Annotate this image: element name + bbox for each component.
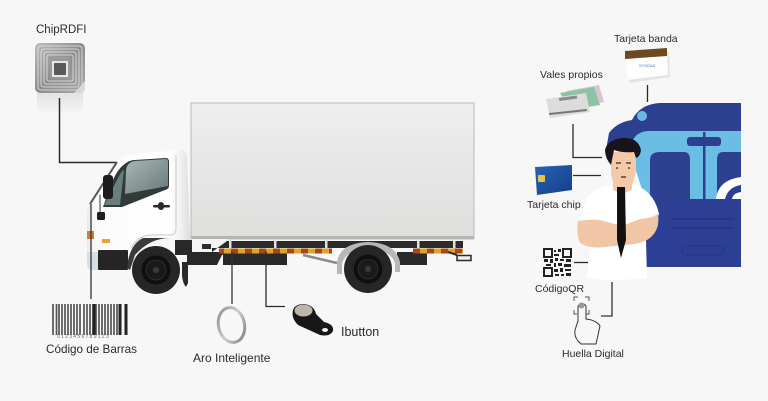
hair	[605, 138, 641, 165]
person	[577, 138, 659, 280]
connector: fingerprint	[601, 282, 612, 316]
connector: QR code	[574, 262, 588, 264]
connector: chip to cab	[60, 98, 117, 162]
cargo box	[191, 103, 474, 239]
icon: chip card	[535, 165, 572, 195]
label: Huella Digital: Huella Digital	[562, 348, 624, 360]
facial features	[616, 163, 631, 177]
arms	[577, 214, 658, 248]
cab	[87, 150, 190, 287]
connector: ibutton	[266, 251, 285, 306]
icon: vouchers	[546, 85, 604, 118]
label: Ibutton: Ibutton	[341, 325, 379, 339]
icon: ibutton	[293, 304, 333, 336]
front wheel	[132, 246, 180, 294]
connector: bar code	[90, 204, 92, 299]
rear wheel	[337, 242, 400, 293]
connector: ring	[231, 251, 233, 304]
icon: RFID chip	[35, 43, 85, 115]
connector: vouchers	[573, 124, 602, 158]
chassis	[175, 239, 471, 265]
label: Tarjeta banda: Tarjeta banda	[614, 33, 678, 45]
icon: bar code	[53, 304, 126, 340]
label: Aro Inteligente: Aro Inteligente	[193, 351, 271, 365]
shirt and body	[580, 184, 659, 280]
neck and face	[611, 152, 636, 194]
icon: stripe card: SYSGAS	[639, 63, 656, 68]
label: CódigoQR: CódigoQR	[535, 283, 584, 295]
tie	[617, 187, 626, 258]
icon: bar code: 0123456789123	[57, 334, 110, 340]
connector: stripe card	[646, 85, 648, 102]
icon: QR code	[544, 249, 571, 276]
label: Tarjeta chip: Tarjeta chip	[527, 199, 581, 211]
label: Código de Barras: Código de Barras	[46, 343, 137, 356]
bus illustration	[606, 103, 741, 267]
label: ChipRDFI: ChipRDFI	[36, 24, 86, 36]
truck	[87, 103, 474, 294]
label: Vales propios: Vales propios	[540, 69, 603, 81]
icon: fingerprint hand	[574, 297, 600, 344]
connector: chip card	[573, 174, 601, 176]
icon: stripe card	[625, 48, 670, 83]
icon: smart ring	[215, 305, 248, 345]
